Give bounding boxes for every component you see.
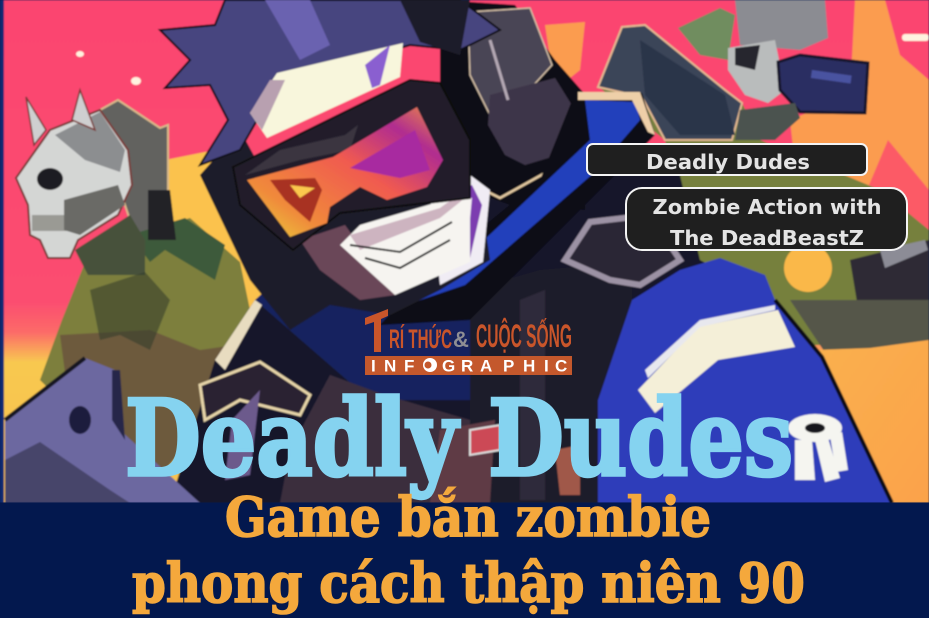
goggles bbox=[233, 80, 470, 250]
label: game subtitle badge: Zombie Action with bbox=[652, 195, 882, 219]
skull bbox=[16, 110, 132, 258]
infographic canvas: CUỘC SỐNG bbox=[476, 318, 572, 354]
title: Deadly Dudes bbox=[125, 376, 793, 500]
camera lens bbox=[778, 55, 868, 113]
olive body bbox=[40, 218, 250, 500]
cheek bbox=[430, 175, 490, 285]
straps bbox=[470, 262, 632, 503]
subtitle: Game bắn zombie bbox=[225, 485, 711, 549]
character: skull zombie left bbox=[16, 90, 250, 500]
hair bbox=[160, 0, 500, 165]
logo: Tri Thuc & Cuoc Song infographic: RÍ THỨC bbox=[389, 323, 452, 354]
skull emblem bbox=[788, 414, 848, 482]
left border strip bbox=[0, 0, 4, 503]
logo: Tri Thuc & Cuoc Song infographic: GRAPHIC bbox=[442, 356, 567, 376]
gun left bbox=[5, 358, 200, 503]
subtitle bbox=[132, 485, 805, 615]
bottom band bbox=[0, 502, 929, 618]
label: game title badge bbox=[587, 144, 867, 175]
jaw bbox=[340, 190, 470, 295]
character: zombie with camera lens top right bbox=[598, 0, 929, 357]
label: game subtitle badge: The DeadBeastZ bbox=[670, 226, 864, 250]
logo: Tri Thuc & Cuoc Song infographic: INF bbox=[371, 356, 414, 376]
dark torso bbox=[170, 165, 892, 503]
label: game subtitle badge bbox=[626, 188, 907, 250]
lower pads bbox=[200, 362, 310, 420]
hero dark neck and hair behind bbox=[200, 130, 490, 330]
flames: orange top right bbox=[545, 0, 929, 210]
navy chest bbox=[255, 268, 480, 400]
flame: yellow behind main character bbox=[165, 150, 270, 330]
shoulder stripes bbox=[638, 310, 795, 413]
label: game title badge: Deadly Dudes bbox=[646, 150, 810, 174]
black headset bbox=[440, 0, 590, 210]
orange lower right background bbox=[815, 340, 929, 503]
forehead bbox=[250, 43, 403, 138]
blue jacket bbox=[598, 258, 892, 503]
character: main hero bbox=[160, 0, 892, 503]
blue collar bbox=[380, 93, 655, 325]
sparks bbox=[76, 34, 929, 85]
subtitle: phong cách thập niên 90 bbox=[132, 551, 805, 615]
logo: Tri Thuc & Cuoc Song infographic: & bbox=[453, 327, 469, 352]
logo: Tri Thuc & Cuoc Song infographic bbox=[365, 309, 572, 376]
backpack bbox=[100, 100, 168, 260]
